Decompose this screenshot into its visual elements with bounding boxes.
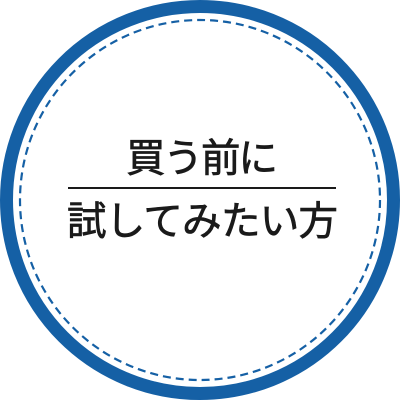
divider line (68, 187, 336, 189)
heading: first line: 買う前に (126, 137, 278, 181)
heading: second line: 試してみたい方 (67, 200, 338, 244)
